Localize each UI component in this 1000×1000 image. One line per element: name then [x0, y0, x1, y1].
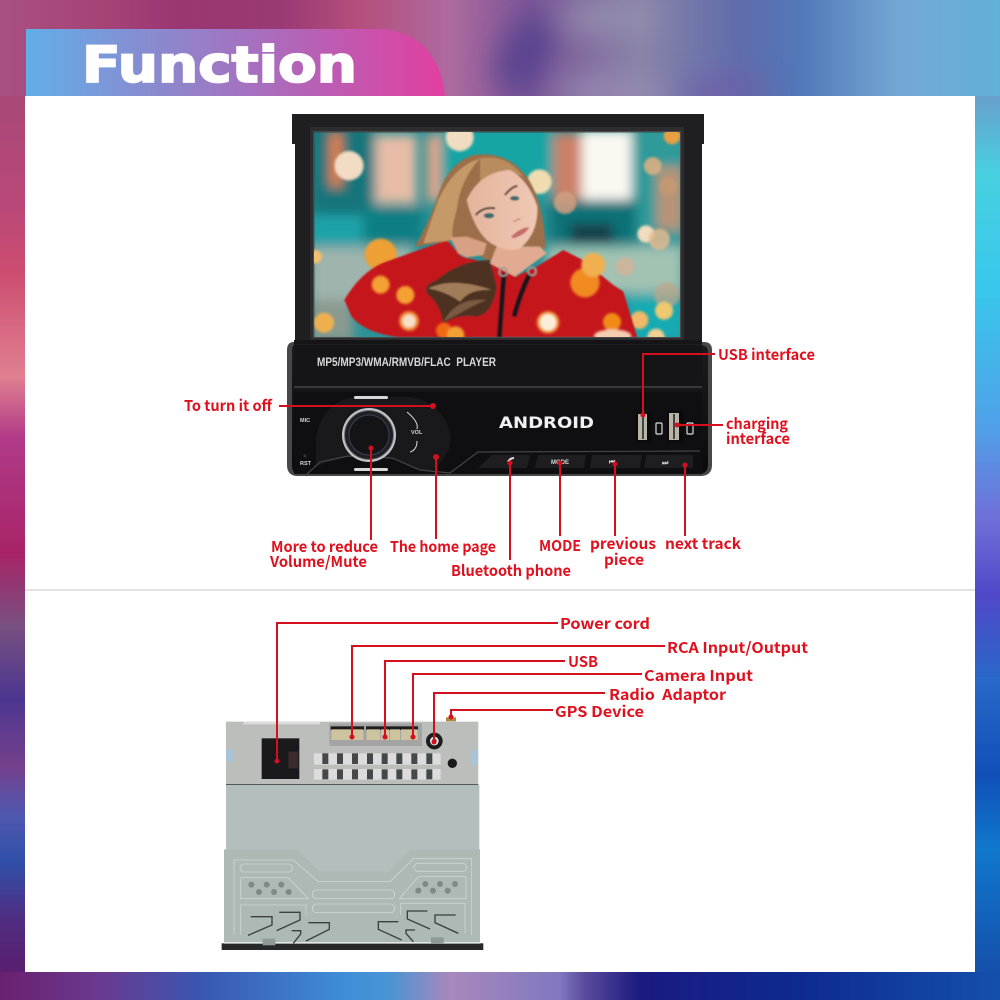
face [467, 170, 537, 250]
eyes and mouth [476, 186, 529, 238]
callout: gps device [448, 701, 644, 722]
callout: charging interface: charging [726, 413, 788, 434]
flip-out screen frame [292, 114, 704, 345]
callout: camera input [410, 665, 754, 740]
lower body [287, 340, 712, 476]
usb ports [636, 411, 693, 442]
wiring socket [262, 738, 299, 779]
callout: previous piece [590, 462, 656, 570]
vol arc: VOL [411, 430, 423, 436]
antenna socket [426, 733, 443, 749]
title: Function [82, 36, 357, 94]
callout: radio adaptor [432, 684, 726, 744]
screen photo [314, 132, 680, 337]
vent grille [314, 753, 441, 780]
control buttons: MODE [551, 460, 569, 466]
control buttons [478, 455, 693, 468]
callout: previous piece: previous [590, 533, 656, 554]
callout: rca input output [350, 637, 809, 740]
callout: mode: MODE [539, 535, 581, 556]
callout: usb interface [640, 344, 815, 418]
callout: usb: USB [568, 651, 598, 672]
mic rst labels: MIC [300, 418, 310, 424]
vol arc [407, 412, 423, 452]
hoodie strings [499, 273, 530, 337]
woman [344, 154, 637, 337]
car stereo rear view [222, 717, 483, 950]
sweater bokeh [372, 253, 631, 344]
beige connectors [329, 723, 422, 746]
mic rst labels: RST [300, 461, 312, 467]
neck [490, 247, 547, 277]
control buttons: ⏭ [662, 460, 669, 467]
callout: next track: next track [665, 533, 741, 554]
callout: home page: The home page [390, 536, 496, 557]
callout: volume: More to reduce [271, 536, 378, 557]
android logo text: ANDROID [499, 413, 594, 432]
callout: bluetooth phone [451, 460, 571, 581]
callout: next track [665, 462, 741, 554]
callout: home page [390, 454, 496, 557]
rear plate [226, 717, 478, 786]
screen bezel [314, 132, 680, 338]
gps connector [446, 717, 456, 721]
callout: mode [539, 460, 581, 556]
callout: charging interface [674, 413, 790, 449]
player text: MP5/MP3/WMA/RMVB/FLAC PLAYER [317, 357, 497, 369]
callout: gps device: GPS Device [555, 701, 644, 722]
callout: radio adaptor: Radio Adaptor [609, 684, 726, 705]
callout: camera input: Camera Input [644, 665, 754, 686]
callout: to turn it off [184, 395, 436, 416]
hair [415, 154, 546, 260]
callout: volume: Volume/Mute [269, 551, 367, 572]
bokeh lights [309, 123, 680, 346]
callout: bluetooth phone: Bluetooth phone [451, 560, 571, 581]
callout: volume [269, 446, 378, 572]
callout: to turn it off: To turn it off [184, 395, 273, 416]
control buttons: ⏮ [609, 459, 616, 466]
car stereo front view [287, 114, 712, 476]
title tab [26, 29, 445, 96]
hand [450, 237, 487, 257]
callout: previous piece: piece [604, 549, 644, 570]
callout: charging interface: interface [726, 428, 790, 449]
woman sweater [344, 240, 637, 337]
callout: usb [382, 651, 598, 740]
callout: power cord [274, 613, 650, 764]
callout: rca input output: RCA Input/Output [667, 637, 809, 658]
callout: usb interface: USB interface [718, 344, 815, 365]
callout: power cord: Power cord [560, 613, 650, 634]
mic rst labels [300, 418, 312, 467]
volume knob [342, 396, 396, 471]
rear chassis [222, 785, 483, 950]
